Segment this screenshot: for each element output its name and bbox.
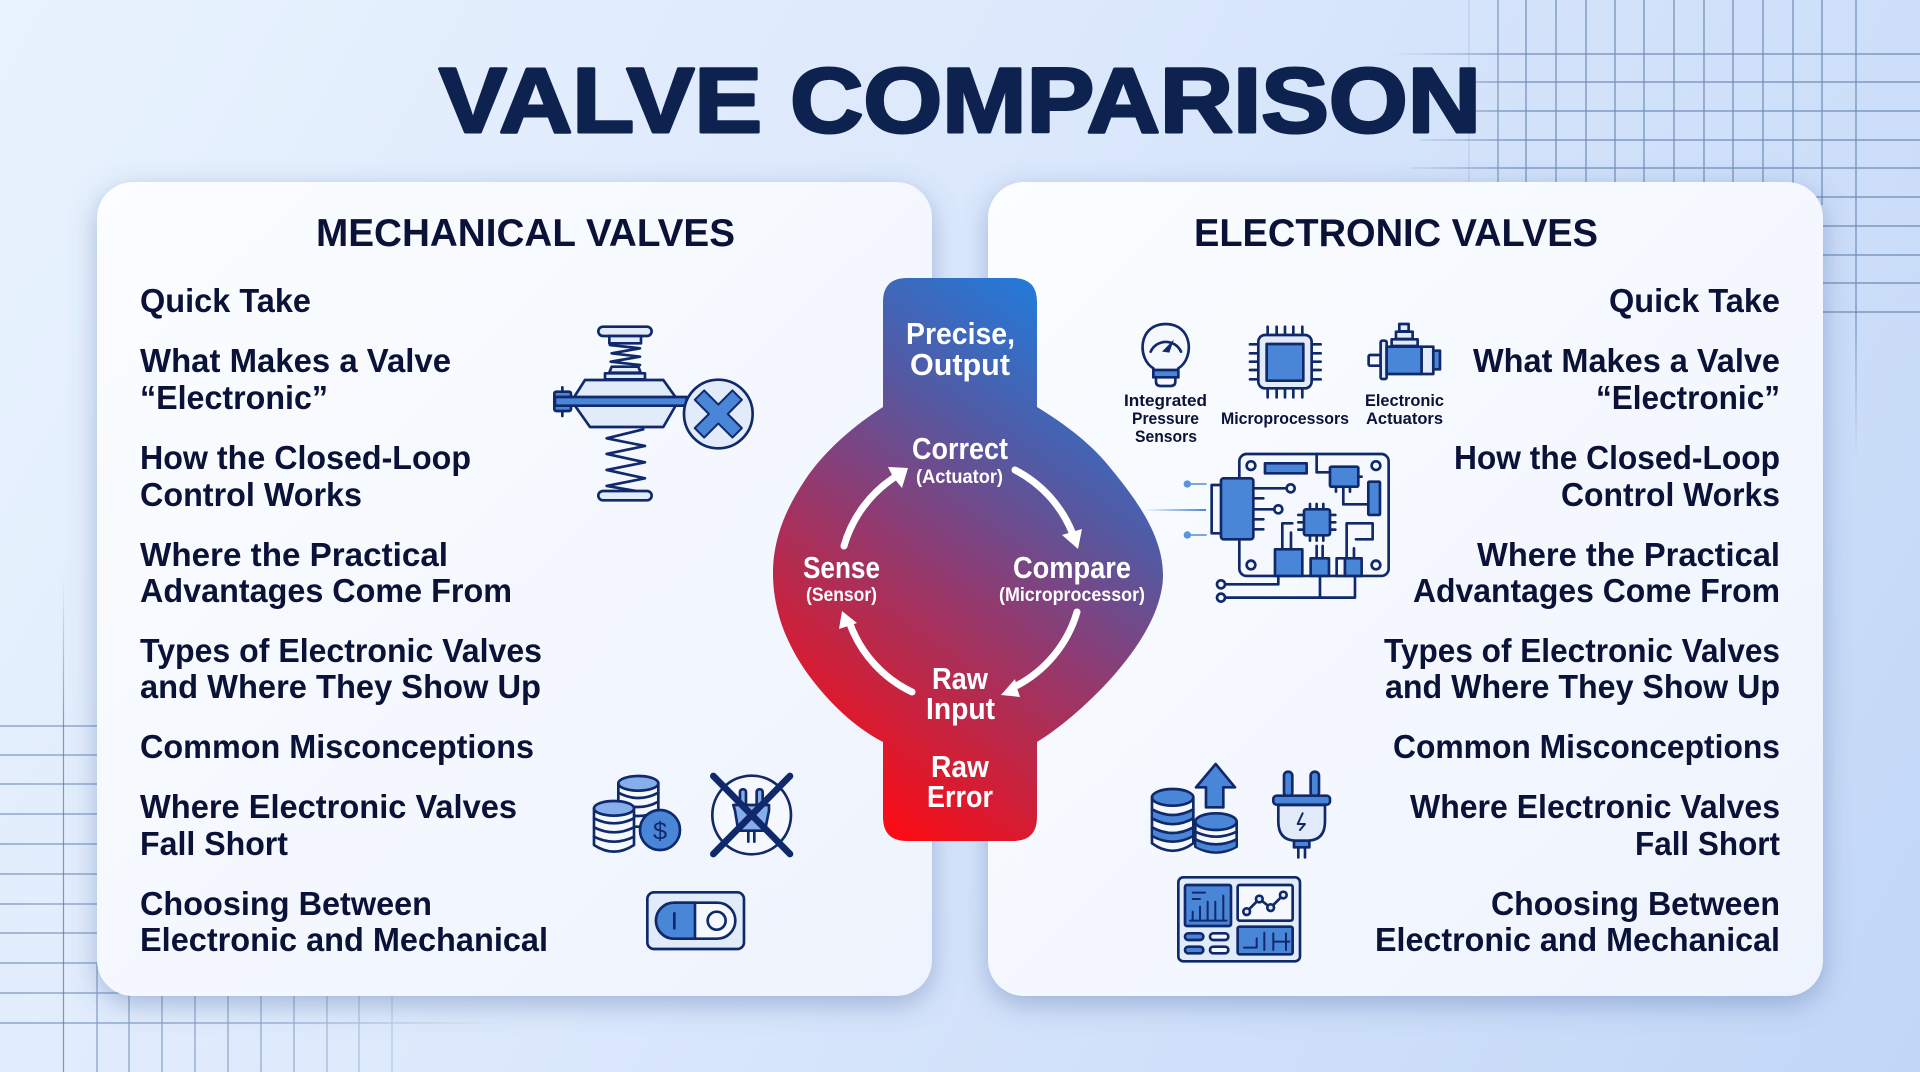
mechanical heading: MECHANICAL VALVES [316,212,735,255]
electronic topic list: Quick Take [1609,282,1780,319]
icon: dashboard [1178,877,1300,961]
mechanical topic list: Choosing Between [140,885,432,922]
background grid: right fading line [1855,312,1857,460]
step: compare [999,550,1145,606]
electronic topic list: Advantages Come From [1413,572,1780,609]
panel: electronic valves [988,182,1823,996]
electronic topic list: Where Electronic Valves [1410,788,1780,825]
icon: crossed out plug [712,776,791,854]
central closed-loop diagram [773,278,1163,841]
icon: plug [1273,772,1330,857]
mechanical topic list [140,282,548,958]
step: raw input: Input [926,691,995,726]
mechanical topic list: Advantages Come From [140,572,512,609]
icon: microprocessor [1250,327,1321,397]
step: compare: (Microprocessor) [999,585,1145,606]
mechanical topic list: Fall Short [140,825,288,862]
step: correct: (Actuator) [916,467,1003,488]
label: integrated pressure sensors: Pressure [1132,409,1199,428]
error label [927,749,993,814]
arrow: sense to correct [844,467,908,546]
arrow: compare to raw input [1001,612,1077,697]
label: electronic actuators: Actuators [1366,409,1443,428]
icon: rising coin stacks [1152,764,1237,852]
background grid: bottom left [0,726,500,1072]
icon: spring valve with X [554,327,756,500]
step: sense [803,550,880,606]
electronic topic list: “Electronic” [1596,379,1780,416]
step: sense: Sense [803,550,880,585]
electronic topic list: Control Works [1561,476,1780,513]
mechanical topic list: Common Misconceptions [140,728,534,765]
electronic topic list: Electronic and Mechanical [1375,921,1780,958]
panel: mechanical valves [97,182,932,996]
electronic topic list: Where the Practical [1477,536,1780,573]
output label [906,316,1015,382]
step: sense: (Sensor) [806,585,877,606]
arrow: raw input to sense [839,611,912,692]
output label: Precise, [906,316,1015,351]
mechanical topic list: How the Closed-Loop [140,439,471,476]
label: microprocessors: Microprocessors [1221,409,1349,428]
icon: coins with dollar [594,776,680,852]
error label: Error [927,779,993,814]
icon: on off switch [647,892,744,949]
step: raw input: Raw [932,661,989,696]
mechanical topic list: Where the Practical [140,536,448,573]
label: integrated pressure sensors: Integrated [1124,391,1207,410]
icon: circuit board [1143,454,1389,602]
loop background shape [773,278,1163,841]
electronic heading: ELECTRONIC VALVES [1194,212,1598,255]
mechanical topic list: Where Electronic Valves [140,788,517,825]
electronic card [988,182,1823,996]
mechanical topic list: Quick Take [140,282,311,319]
electronic topic list: Choosing Between [1491,885,1780,922]
electronic topic list: What Makes a Valve [1473,342,1780,379]
step: compare: Compare [1013,550,1131,585]
label: electronic actuators [1365,391,1444,428]
label: integrated pressure sensors [1124,391,1207,446]
icon: pressure sensor [1143,324,1189,386]
electronic topic list [1375,282,1780,958]
step: correct [912,431,1008,488]
icon: electronic actuator [1369,324,1440,379]
step: correct: Correct [912,431,1008,466]
step: raw input [926,661,995,726]
title: VALVE COMPARISON [439,50,1481,152]
mechanical card [97,182,932,996]
mechanical topic list: Control Works [140,476,362,513]
arrow: correct to compare [1015,470,1082,549]
icon: coins with dollar: $ [653,817,667,845]
electronic topic list: Fall Short [1635,825,1780,862]
electronic topic list: Types of Electronic Valves [1384,632,1780,669]
mechanical topic list: Types of Electronic Valves [140,632,542,669]
mechanical topic list: “Electronic” [140,379,328,416]
background grid: vertical accent [62,575,64,1072]
error label: Raw [931,749,990,784]
mechanical topic list: What Makes a Valve [140,342,451,379]
electronic topic list: Common Misconceptions [1393,728,1780,765]
label: integrated pressure sensors: Sensors [1135,427,1197,446]
output label: Output [910,347,1010,382]
electronic topic list: and Where They Show Up [1385,668,1780,705]
background grid: top right [1380,0,1920,312]
mechanical topic list: Electronic and Mechanical [140,921,548,958]
label: electronic actuators: Electronic [1365,391,1444,410]
electronic topic list: How the Closed-Loop [1454,439,1780,476]
mechanical topic list: and Where They Show Up [140,668,541,705]
